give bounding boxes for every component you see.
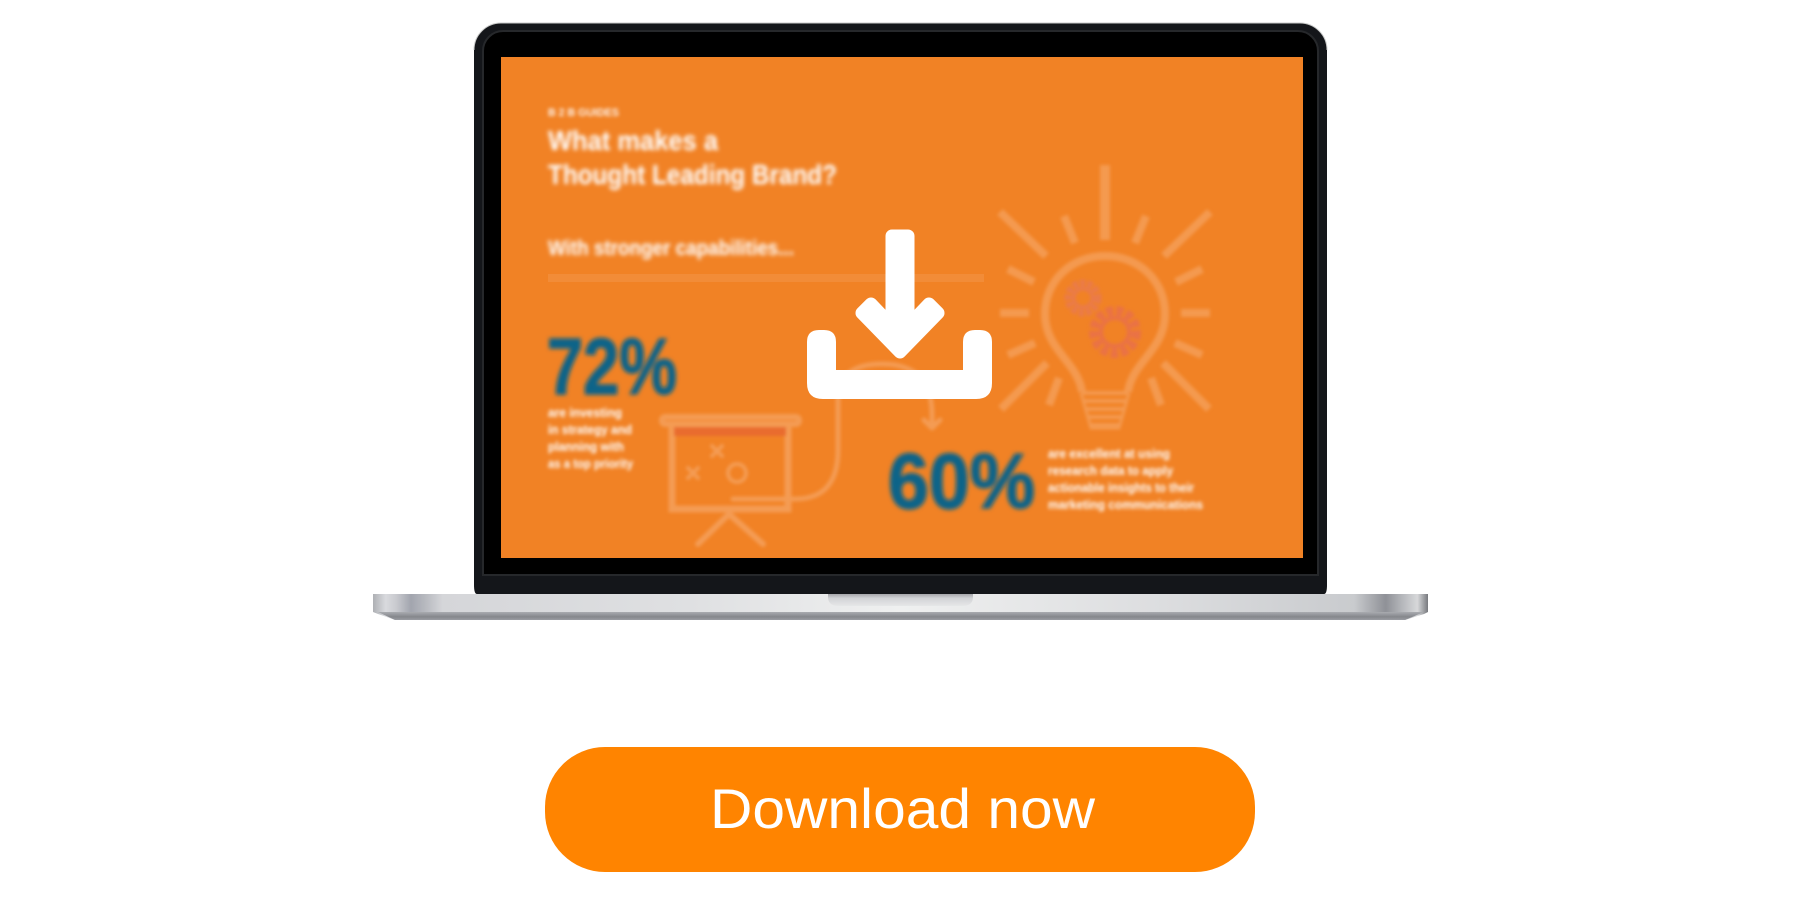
small label: B 2 B GUIDES <box>548 107 619 119</box>
download button <box>545 747 1255 872</box>
stat 60% caption <box>1048 446 1203 512</box>
laptop <box>373 23 1428 620</box>
download arrow <box>862 236 938 352</box>
stat 72% caption <box>548 405 634 471</box>
stat 72% caption: as a top priority <box>548 456 634 471</box>
stat 60% caption: marketing communications <box>1048 497 1203 512</box>
divider <box>548 274 984 282</box>
stat 72% caption: are investing <box>548 405 622 420</box>
icon: download <box>807 236 992 399</box>
bulb base <box>1082 393 1128 425</box>
stat 60%: 60% <box>888 437 1035 525</box>
icon: lightbulb <box>1000 165 1210 428</box>
screen panel <box>501 57 1303 558</box>
arrow: connector <box>733 364 940 499</box>
download tray <box>807 330 992 399</box>
button label: Download now <box>710 777 1096 840</box>
screen heading <box>548 125 837 190</box>
stat 72% caption: planning with <box>548 439 624 454</box>
screen subheading: With stronger capabilities... <box>548 237 794 260</box>
bulb rays <box>1000 165 1210 409</box>
gear large <box>1094 311 1136 353</box>
stat 60% caption: actionable insights to their <box>1048 480 1194 495</box>
laptop base <box>373 594 1428 620</box>
bulb outline <box>1045 256 1165 392</box>
projector red strip <box>674 427 786 436</box>
stat 60% caption: are excellent at using <box>1048 446 1170 461</box>
screen heading: What makes a <box>548 125 718 156</box>
laptop lid <box>474 23 1327 594</box>
icon: projector board <box>662 417 799 544</box>
gear small <box>1069 284 1097 312</box>
stat 60% caption: research data to apply <box>1048 463 1174 478</box>
stat 72% caption: in strategy and <box>548 422 632 437</box>
screen heading: Thought Leading Brand? <box>548 159 837 190</box>
laptop notch <box>828 594 973 606</box>
stat 72%: 72% <box>547 322 677 411</box>
